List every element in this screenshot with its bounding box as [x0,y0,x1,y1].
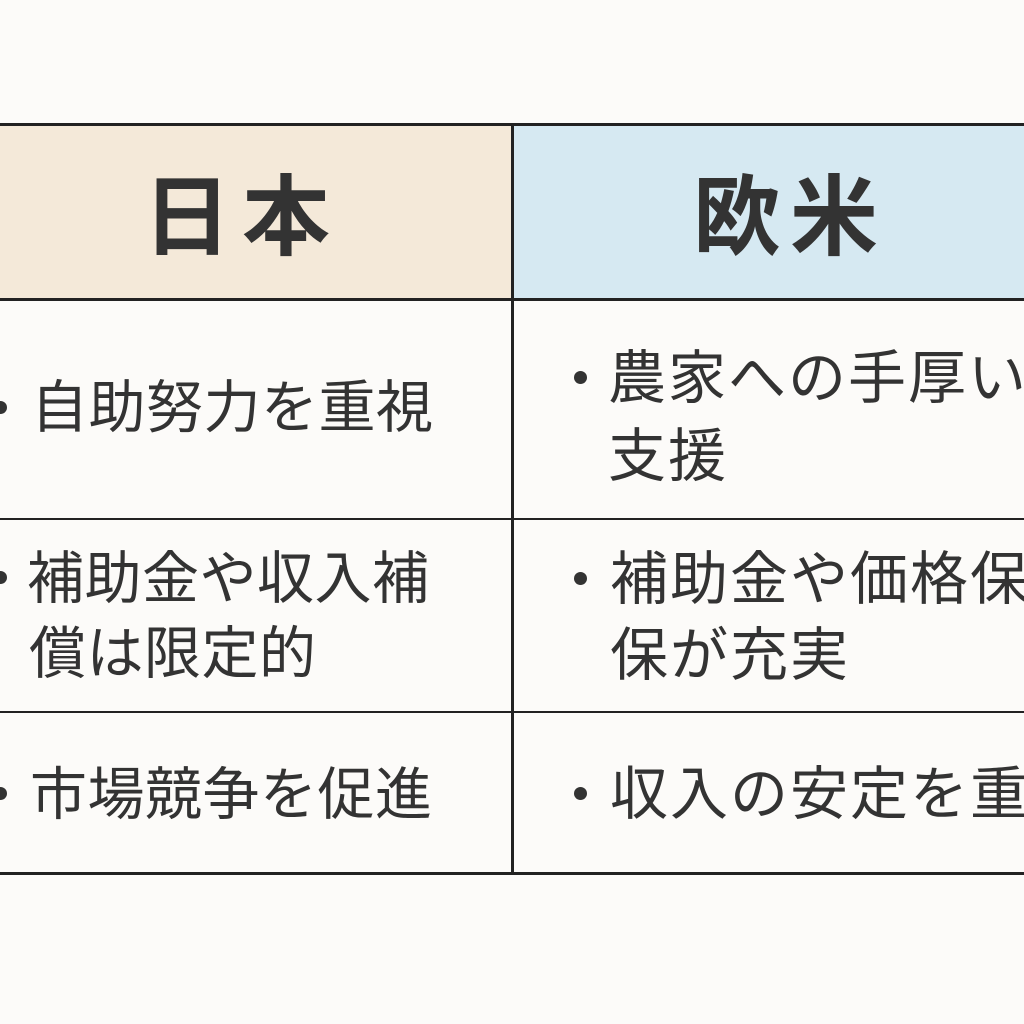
header cell: Japan [0,125,511,299]
row 2 Japan: limited subsidies [0,547,430,686]
row 3 West: income stability: 収入の安定を重 [610,762,1024,827]
row 2 West: subsidies and price guarantees: 保が充実 [610,623,850,688]
row 2 West: subsidies and price guarantees: 補助金や価格保 [610,547,1024,612]
header cell: Europe and America [514,125,1024,299]
row 3 Japan: market competition: 市場競争を促進 [30,763,432,827]
heading: Europe and America: 欧米 [693,168,887,267]
row 2 Japan: limited subsidies: 補助金や収入補 [27,547,430,611]
row 2 Japan: limited subsidies: 償は限定的 [29,622,316,686]
row 1 West: generous farm support: 支援 [608,424,728,489]
row 1 Japan: self-reliance: 自助努力を重視 [31,376,434,440]
row 2 West: subsidies and price guarantees [574,547,1024,688]
row 1 West: generous farm support [574,346,1024,489]
heading: Japan: 日本 [143,168,341,267]
comparison table [0,123,1024,875]
row 1 West: generous farm support: 農家への手厚い [608,346,1024,411]
